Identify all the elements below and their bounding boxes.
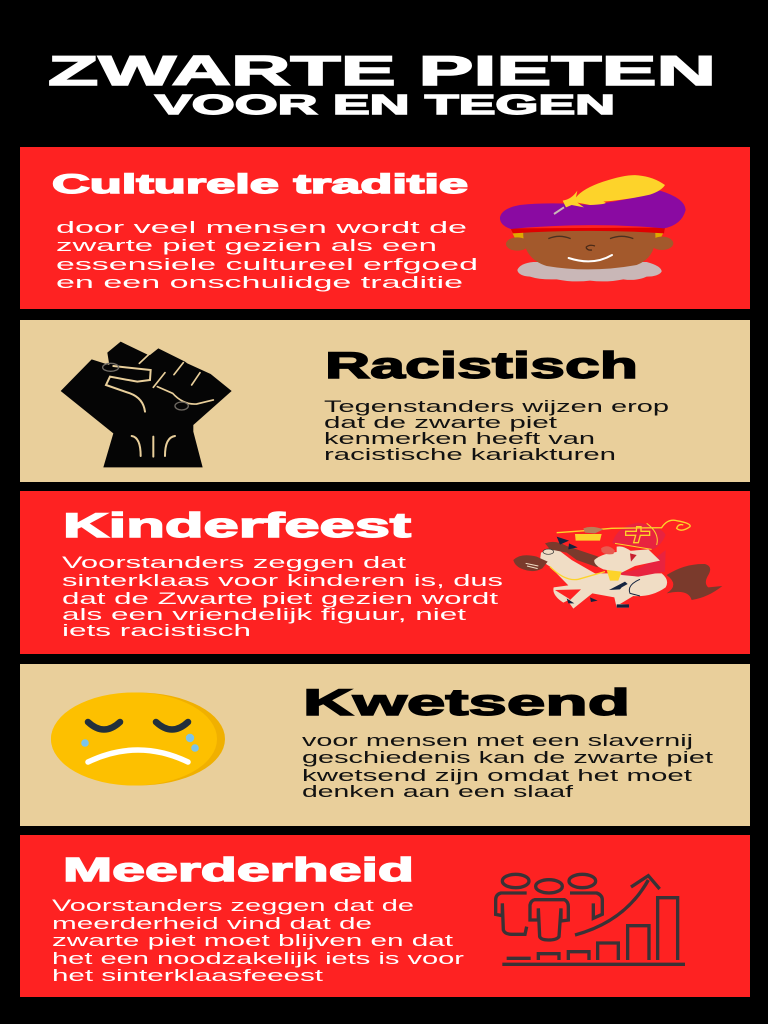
text: kinderfeest xyxy=(62,553,503,640)
staff and crook xyxy=(557,520,690,533)
mitre xyxy=(612,523,666,549)
heading: racistisch: Racistisch xyxy=(325,345,638,386)
horse body xyxy=(540,547,667,609)
horse eye and ears xyxy=(543,549,554,554)
icon: crying sad face xyxy=(51,692,225,786)
heading: culturele traditie: Culturele traditie xyxy=(52,169,468,199)
text: kinderfeest: dat de Zwarte piet gezien wordt xyxy=(62,589,499,608)
panel: kwetsend xyxy=(20,664,750,826)
panel: culturele traditie xyxy=(20,147,750,309)
title: VOOR EN TEGEN xyxy=(155,89,615,120)
text: culturele traditie: zwarte piet gezien als een xyxy=(56,236,437,255)
text: meerderheid: Voorstanders zeggen dat de xyxy=(52,896,414,915)
heading: meerderheid: Meerderheid xyxy=(63,851,414,888)
heading: kinderfeest: Kinderfeest xyxy=(63,507,411,545)
text: kinderfeest: Voorstanders zeggen dat xyxy=(62,553,406,572)
icon: piet head with feathered hat xyxy=(500,175,686,281)
text: culturele traditie: en een onschulidge traditie xyxy=(56,273,463,292)
text: meerderheid: het sinterklaasfeeest xyxy=(52,966,323,985)
text: kinderfeest: sinterklaas voor kinderen is, dus xyxy=(62,571,503,590)
text: culturele traditie xyxy=(56,218,478,292)
text: meerderheid: zwarte piet moet blijven en dat xyxy=(52,931,453,950)
mane xyxy=(545,542,598,567)
text: kwetsend xyxy=(302,731,713,801)
reins xyxy=(550,567,605,580)
icon: raised fist xyxy=(61,342,232,467)
tail xyxy=(667,564,722,600)
text: culturele traditie: essensiele cultureel erfgoed xyxy=(56,255,478,274)
icon: sinterklaas on horse xyxy=(513,520,722,609)
text: kwetsend: voor mensen met een slavernij xyxy=(302,731,693,750)
text: meerderheid xyxy=(52,896,465,985)
panel: meerderheid xyxy=(20,835,750,997)
text: kwetsend: denken aan een slaaf xyxy=(302,782,573,801)
text: kwetsend: kwetsend zijn omdat het moet xyxy=(302,766,692,785)
robe xyxy=(613,550,666,577)
text: racistisch: kenmerken heeft van xyxy=(324,429,595,448)
text: kinderfeest: iets racistisch xyxy=(62,621,251,640)
boots and hooves xyxy=(567,582,629,608)
text: racistisch: Tegenstanders wijzen erop xyxy=(324,397,669,416)
heading: kwetsend: Kwetsend xyxy=(303,682,630,723)
beard xyxy=(594,549,660,573)
text: meerderheid: het een noodzakelijk iets is voor xyxy=(52,949,465,968)
hand and book xyxy=(583,527,603,533)
text: racistisch: dat de zwarte piet xyxy=(324,413,557,432)
text: racistisch xyxy=(324,397,669,464)
text: kwetsend: geschiedenis kan de zwarte piet xyxy=(302,748,713,767)
muzzle xyxy=(513,555,548,571)
panel: kinderfeest xyxy=(20,491,750,654)
text: kinderfeest: als een vriendelijk figuur, niet xyxy=(62,605,467,624)
icon: people and rising bar chart xyxy=(496,874,685,964)
title xyxy=(48,47,716,120)
text: racistisch: racistische kariakturen xyxy=(324,445,616,464)
text: meerderheid: meerderheid vind dat de xyxy=(52,914,372,933)
panel: racistisch xyxy=(20,320,750,482)
title: ZWARTE PIETEN xyxy=(48,47,716,94)
text: culturele traditie: door veel mensen wordt de xyxy=(56,218,467,237)
